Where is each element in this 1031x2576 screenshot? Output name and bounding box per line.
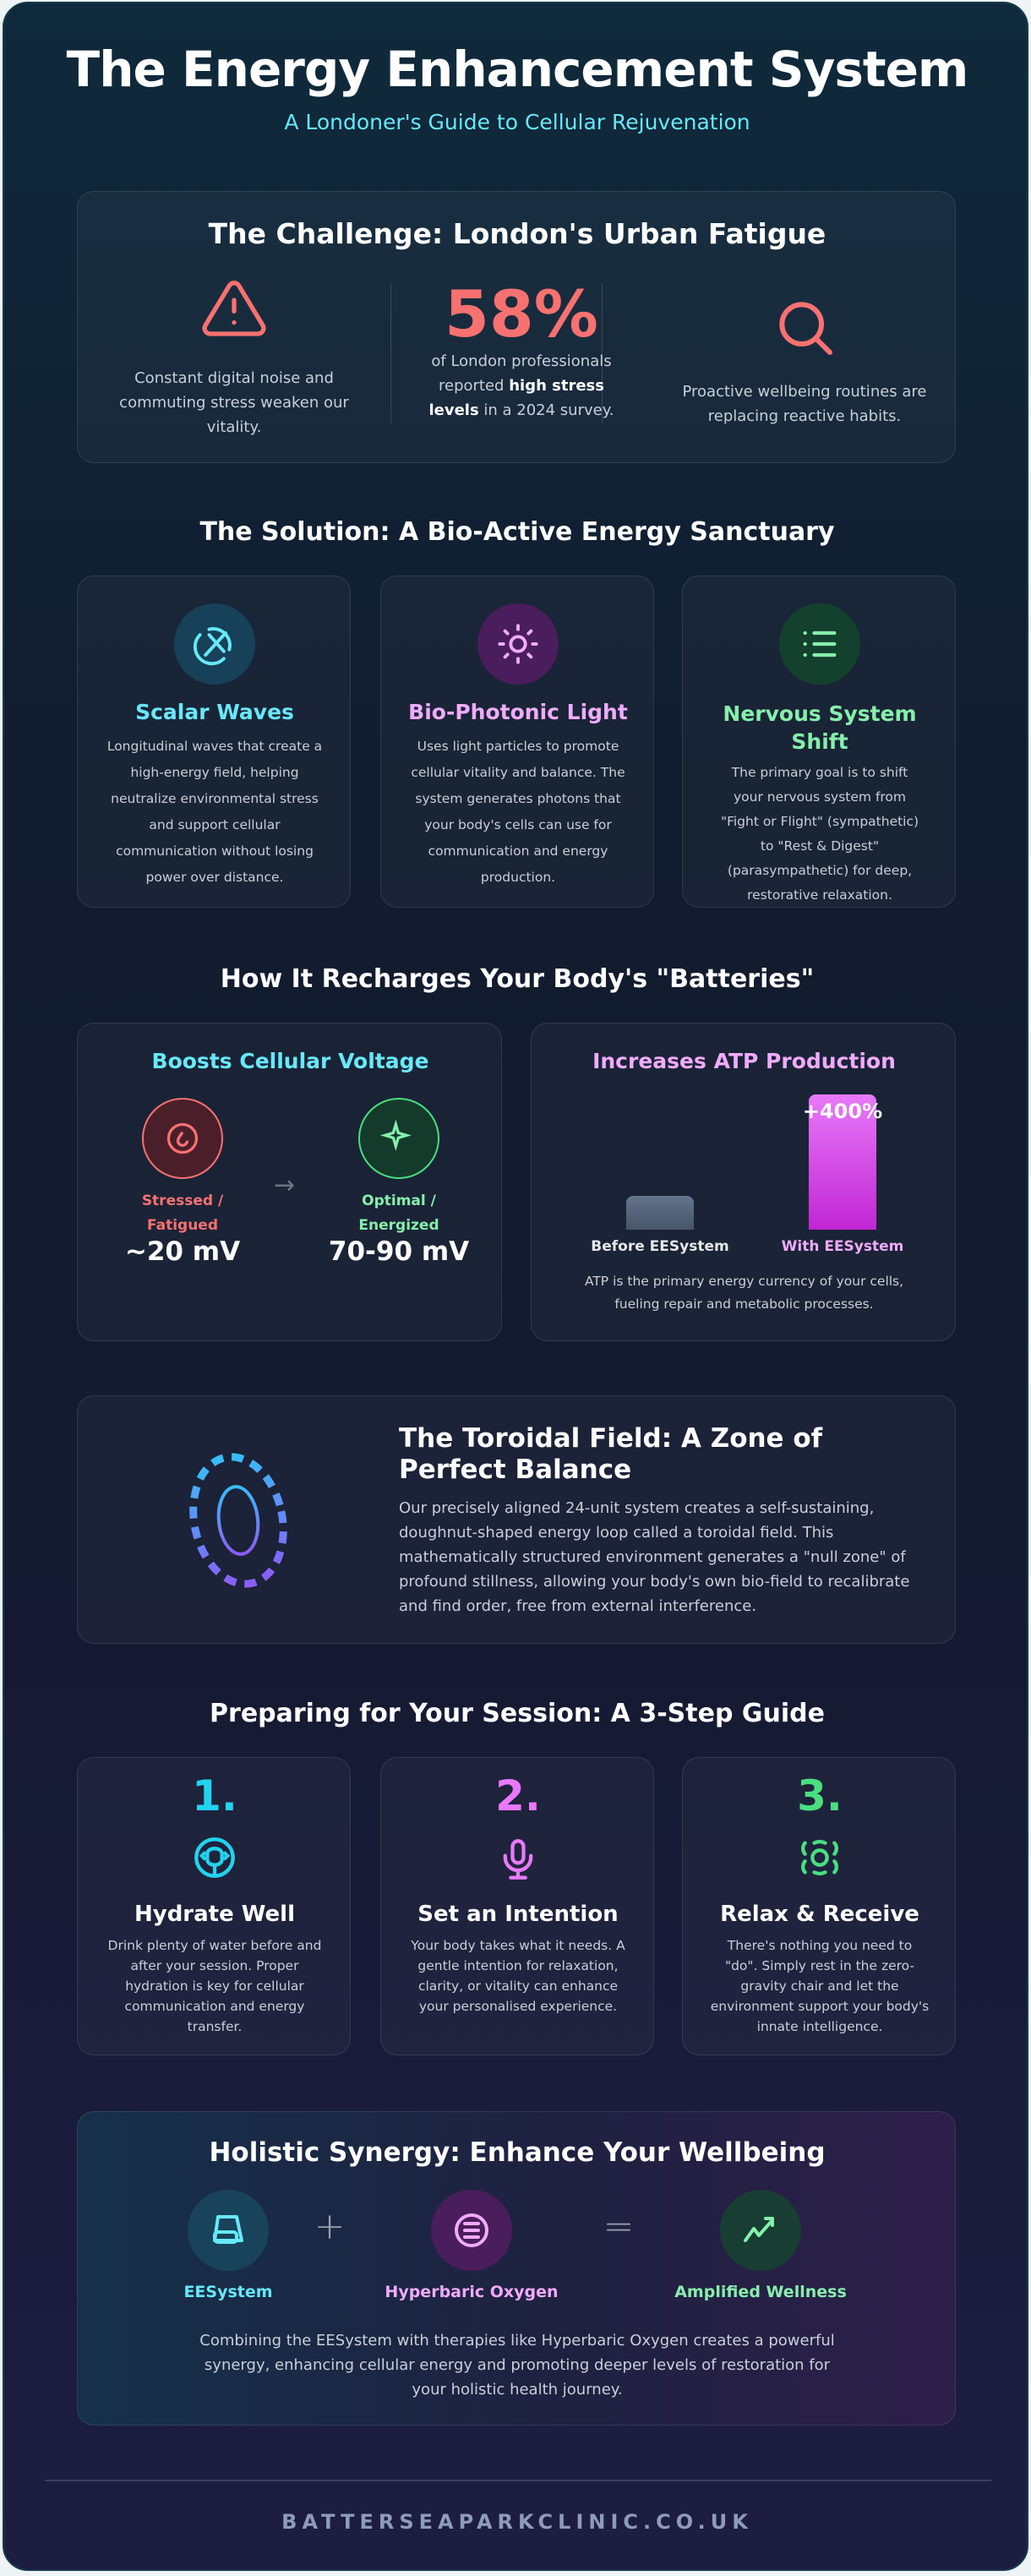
heading: synergy: Holistic Synergy: Enhance Your Wellbeing: [209, 2137, 826, 2168]
text: Uses light particles to promote cellular vitality and balance. The system generates photons that your body's cells can use for communication and energy production.: [411, 739, 625, 885]
text: Your body takes what it needs. A gentle intention for relaxation, clarity, or vitality can enhance your personalised experience.: [411, 1938, 625, 2014]
icon: sun: [477, 603, 559, 685]
heading: batteries: How It Recharges Your Body's "Batteries": [221, 964, 814, 994]
text: synergy: Combining the EESystem with therapies like Hyperbaric Oxygen creates a powerful synergy, enhancing cellular energy and promoting deeper levels of restoration for your holistic health journey.: [199, 2332, 835, 2399]
icon: satellite: [174, 603, 255, 685]
panel: step 1: [77, 1757, 351, 2055]
icon: toroid: [189, 1453, 287, 1588]
title: toroidal: The Toroidal Field: A Zone of Perfect Balance: [399, 1423, 822, 1485]
label: hyperbaric oxygen: Hyperbaric Oxygen: [385, 2283, 559, 2301]
label: optimal: Optimal /: [362, 1192, 436, 1209]
label: stressed: Stressed /: [142, 1192, 223, 1209]
icon: list: [779, 603, 860, 685]
number 2: 2.: [495, 1771, 541, 1820]
icon: amplified wellness: [720, 2190, 801, 2271]
value: +400%: +400%: [803, 1100, 882, 1123]
text: Drink plenty of water before and after your session. Proper hydration is key for cellular communication and energy transfer.: [108, 1938, 321, 2034]
text: There's nothing you need to: [728, 1938, 912, 1953]
icon: optimal: [358, 1098, 439, 1179]
icon: hydrate: [194, 1837, 235, 1878]
panel: challenge: [77, 191, 956, 463]
title: The Energy Enhancement System: [67, 41, 968, 98]
bar chart: [591, 1094, 903, 1255]
stat: 58%: 58%: [445, 276, 598, 352]
title: nervous system shift: Nervous System: [723, 701, 917, 726]
panel: scalar waves: [77, 576, 351, 908]
label: stressed: [142, 1192, 223, 1234]
text: Longitudinal waves that create a high-energy field, helping neutralize environmental stress and support cellular communication without losing power over distance.: [107, 739, 322, 885]
text: ATP: ATP is the primary energy currency of your cells, fueling repair and metabolic processes.: [585, 1274, 903, 1312]
text: "do". Simply rest in the zero-: [725, 1958, 914, 1973]
panel: bio-photonic light: [380, 576, 654, 908]
heading: solution: The Solution: A Bio-Active Energy Sanctuary: [199, 517, 835, 547]
panel: ATP production: [531, 1023, 956, 1341]
number 3: 3.: [797, 1771, 843, 1820]
title: nervous system shift: Shift: [791, 729, 848, 754]
label: with: With EESystem: [782, 1238, 903, 1255]
plus: +: [314, 2205, 345, 2248]
subtitle: A Londoner's Guide to Cellular Rejuvenation: [284, 110, 750, 134]
label: stressed: Fatigued: [147, 1217, 218, 1234]
title: increases ATP: Increases ATP Production: [592, 1049, 896, 1073]
icon: relax: [801, 1839, 838, 1876]
label: amplified wellness: Amplified Wellness: [674, 2283, 847, 2301]
title: set an intention: Set an Intention: [417, 1902, 619, 1927]
title: nervous system shift: [723, 701, 917, 754]
title: hydrate well: Hydrate Well: [134, 1902, 295, 1927]
heading: challenge: The Challenge: London's Urban Fatigue: [209, 217, 826, 250]
bar: before: [626, 1196, 694, 1230]
footer: BATTERSEAPARKCLINIC.CO.UK: [281, 2510, 753, 2534]
panel: toroidal field: [77, 1395, 956, 1644]
text: gravity chair and let the environment support your body's innate intelligence.: [711, 1978, 929, 2034]
equals: =: [603, 2205, 634, 2248]
panel: holistic synergy: [77, 2111, 956, 2426]
panel: cellular voltage: [77, 1023, 502, 1341]
label: EESystem: EESystem: [183, 2283, 273, 2301]
number 1: 1.: [192, 1771, 237, 1820]
title: scalar waves: Scalar Waves: [135, 700, 294, 724]
value: 70-90 mV: 70-90 mV: [329, 1236, 469, 1267]
text: [711, 1938, 929, 2034]
label: optimal: [358, 1192, 439, 1234]
label: before: Before EESystem: [591, 1238, 729, 1255]
panel: step 2: [380, 1757, 654, 2055]
label: optimal: Energized: [358, 1217, 439, 1234]
icon: microphone: [504, 1839, 532, 1880]
icon: EESystem: [188, 2190, 269, 2271]
arrow: →: [274, 1171, 295, 1200]
panel: nervous system shift: [682, 576, 956, 908]
text: stat description: of London professionals reported high stress levels in a 2024 survey.: [428, 352, 614, 419]
icon: stressed: [142, 1098, 223, 1179]
title: bio-photonic light: Bio-Photonic Light: [408, 700, 628, 724]
text: toroidal: Our precisely aligned 24-unit system creates a self-sustaining, doughnut-shaped energy loop called a toroidal field. This mathematically structured environment generates a "null zone" of profound stillness, allowing your body's own bio-field to recalibrate and find order, free from external interference.: [399, 1499, 909, 1615]
value: 20 mV: ~20 mV: [125, 1236, 240, 1267]
text: The primary goal is to shift your nervous system from "Fight or Flight" (sympathetic) to "Rest & Digest" (parasympathetic) for deep, restorative relaxation.: [721, 765, 919, 903]
panel: step 3: [682, 1757, 956, 2055]
bar: with: [809, 1094, 876, 1230]
title: relax & receive: Relax & Receive: [720, 1902, 919, 1927]
title: boosts cellular voltage: Boosts Cellular Voltage: [152, 1049, 428, 1073]
icon: hyperbaric oxygen: [431, 2190, 512, 2271]
heading: steps: Preparing for Your Session: A 3-Step Guide: [210, 1699, 825, 1728]
text: proactive: Proactive wellbeing routines are replacing reactive habits.: [682, 383, 927, 425]
text: digital noise: Constant digital noise and commuting stress weaken our vitality.: [119, 369, 349, 436]
icon: search: [779, 302, 832, 355]
icon: warning: [202, 281, 266, 336]
